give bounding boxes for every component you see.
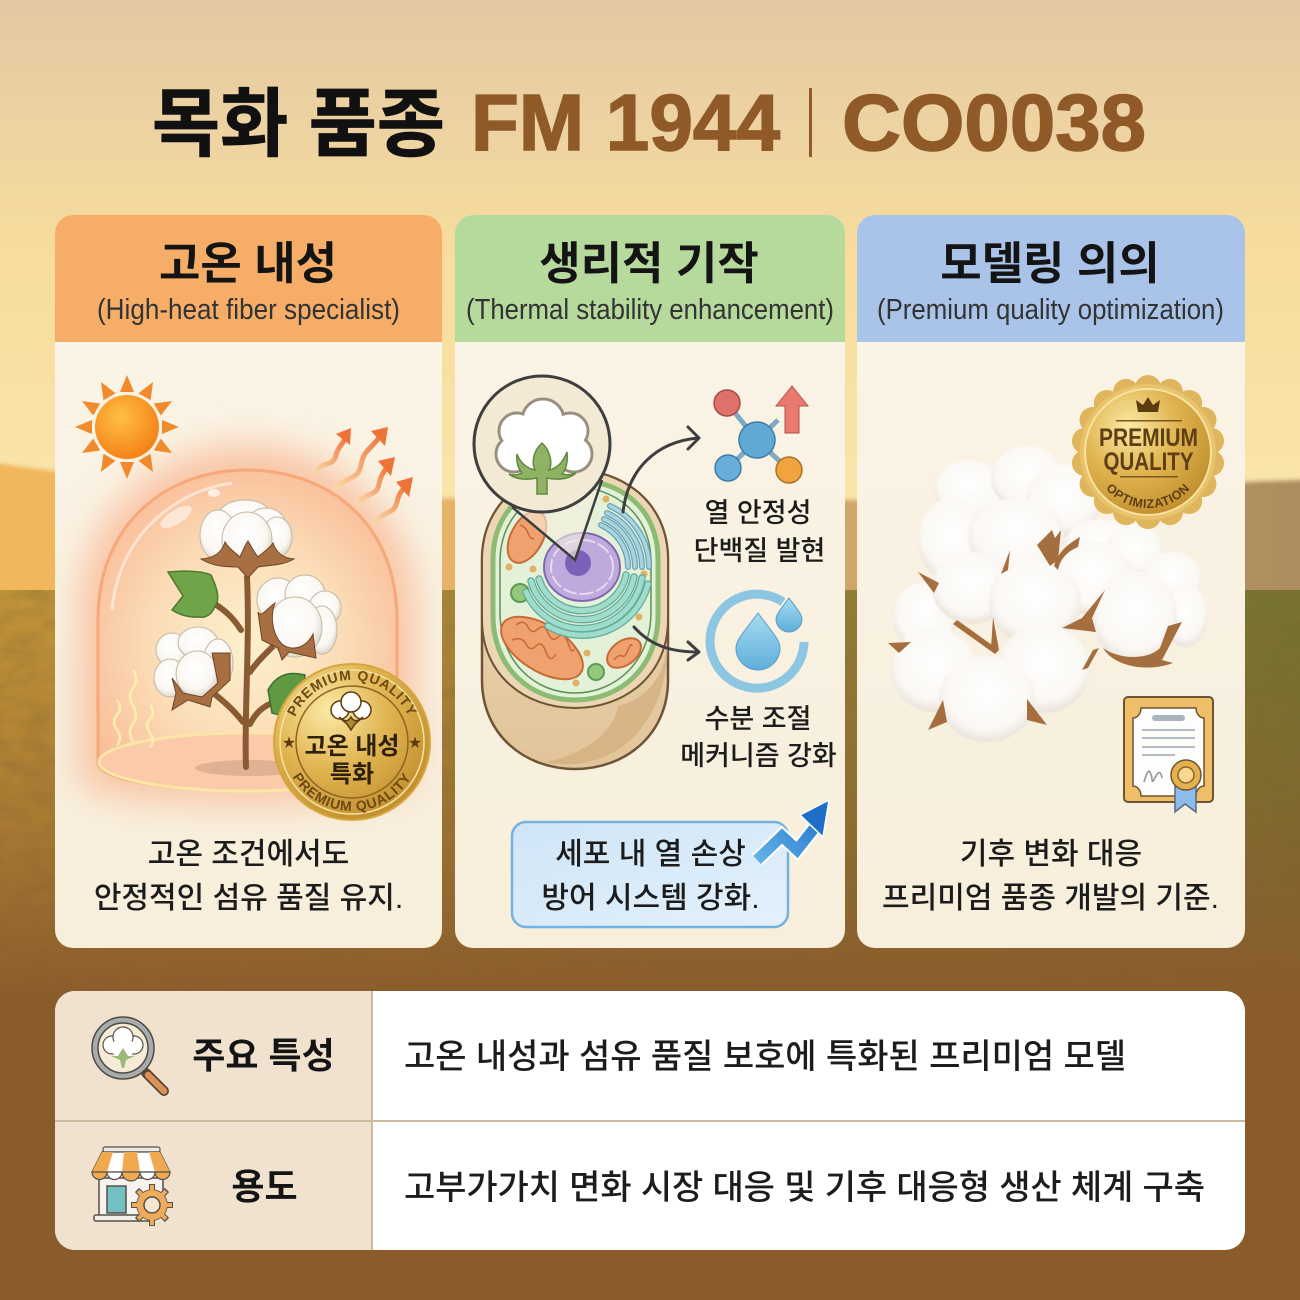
cotton boll right <box>257 575 341 660</box>
nucleus <box>544 533 620 601</box>
cotton boll top <box>200 500 294 578</box>
gold medal badge: PREMIUM QUALITY <box>292 772 410 813</box>
summary table <box>55 991 1245 1250</box>
mitochondria <box>491 505 646 692</box>
sepals <box>888 530 1182 730</box>
panel header: physiological mechanism: 생리적 기작 <box>539 238 759 289</box>
caption <box>94 838 403 915</box>
label: heat-stable protein <box>694 498 825 566</box>
magnified cotton circle <box>474 376 610 512</box>
gold seal: premium quality: QUALITY <box>1104 448 1194 476</box>
panel header: high-heat resistance: (High-heat fiber specialist) <box>97 294 400 326</box>
row: usage: 용도 <box>231 1166 298 1207</box>
panel: modeling significance <box>857 215 1245 948</box>
organelles <box>511 584 604 680</box>
label: heat-stable protein: 단백질 발현 <box>694 536 825 566</box>
callout box: 세포 내 열 손상 <box>555 838 746 871</box>
panel header: modeling significance: 모델링 의의 <box>940 238 1160 289</box>
caption <box>882 838 1219 915</box>
panel header: modeling significance: (Premium quality optimization) <box>877 294 1224 326</box>
row: key characteristics: 주요 특성 <box>192 1035 335 1076</box>
panel header: modeling significance <box>857 215 1245 342</box>
row: usage <box>92 1147 1205 1226</box>
label: heat-stable protein: 열 안정성 <box>705 498 811 528</box>
cotton boll left <box>154 627 233 710</box>
caption: 기후 변화 대응 <box>960 838 1142 871</box>
title: CO0038 <box>842 78 1146 167</box>
panel: high-heat resistance <box>55 215 442 948</box>
row: key characteristics: 고온 내성과 섬유 품질 보호에 특화된 프리미엄 모델 <box>404 1038 1126 1076</box>
icon: certificate <box>1124 697 1213 812</box>
row: key characteristics <box>92 1017 1126 1091</box>
label: water regulation: 메커니즘 강화 <box>680 741 837 771</box>
icon: cotton plant <box>154 500 341 776</box>
panel header: physiological mechanism <box>455 215 845 342</box>
title: FM 1944 <box>471 78 780 167</box>
gold seal: premium quality <box>1072 375 1224 529</box>
panel header: high-heat resistance: 고온 내성 <box>159 238 337 289</box>
label: water regulation <box>680 704 837 771</box>
icon: water ring <box>710 594 804 688</box>
gold medal badge: PREMIUM QUALITY <box>287 670 417 716</box>
cotton boll cluster <box>888 446 1207 742</box>
gold medal badge: 고온 내성 <box>304 733 400 760</box>
endoplasmic reticulum <box>526 575 648 635</box>
caption: 고온 조건에서도 <box>148 838 349 871</box>
panel header: physiological mechanism: (Thermal stability enhancement) <box>466 294 834 326</box>
icon: magnifier with cotton <box>92 1017 164 1091</box>
arrow to protein <box>623 427 699 512</box>
icon: rising trend arrow <box>757 800 829 860</box>
leaf <box>168 571 218 617</box>
callout box: 방어 시스템 강화. <box>541 882 760 915</box>
medal cotton icon <box>331 692 371 730</box>
gold seal: premium quality: OPTIMIZATION <box>1108 484 1190 508</box>
glass dome <box>98 470 397 791</box>
gold medal badge: 특화 <box>330 761 374 788</box>
cell diagram <box>474 376 699 769</box>
magnifier pointer <box>512 480 602 560</box>
row: usage: 고부가가치 면화 시장 대응 및 기후 대응형 생산 체계 구축 <box>404 1169 1205 1207</box>
gold seal: premium quality: PREMIUM <box>1099 424 1198 452</box>
gold medal badge: ★ <box>282 735 296 750</box>
label: water regulation: 수분 조절 <box>705 704 811 734</box>
title: 목화 품종 <box>152 82 445 166</box>
panel header: high-heat resistance <box>55 215 442 342</box>
icon: heat arrows <box>315 427 413 522</box>
arrow to water regulation <box>634 627 699 660</box>
gold medal badge <box>273 663 431 821</box>
icon: molecule with arrow <box>714 386 808 483</box>
icon: sun <box>75 375 179 479</box>
callout box <box>512 822 788 927</box>
panel: physiological mechanism <box>455 215 845 948</box>
leaf lower <box>268 674 305 720</box>
caption: 안정적인 섬유 품질 유지. <box>94 882 403 915</box>
gold medal badge: ★ <box>408 735 422 750</box>
glow behind dome <box>80 445 415 802</box>
caption: 프리미엄 품종 개발의 기준. <box>882 882 1219 915</box>
golgi <box>526 506 649 635</box>
icon: store with gear <box>92 1147 173 1226</box>
title <box>152 78 1146 167</box>
